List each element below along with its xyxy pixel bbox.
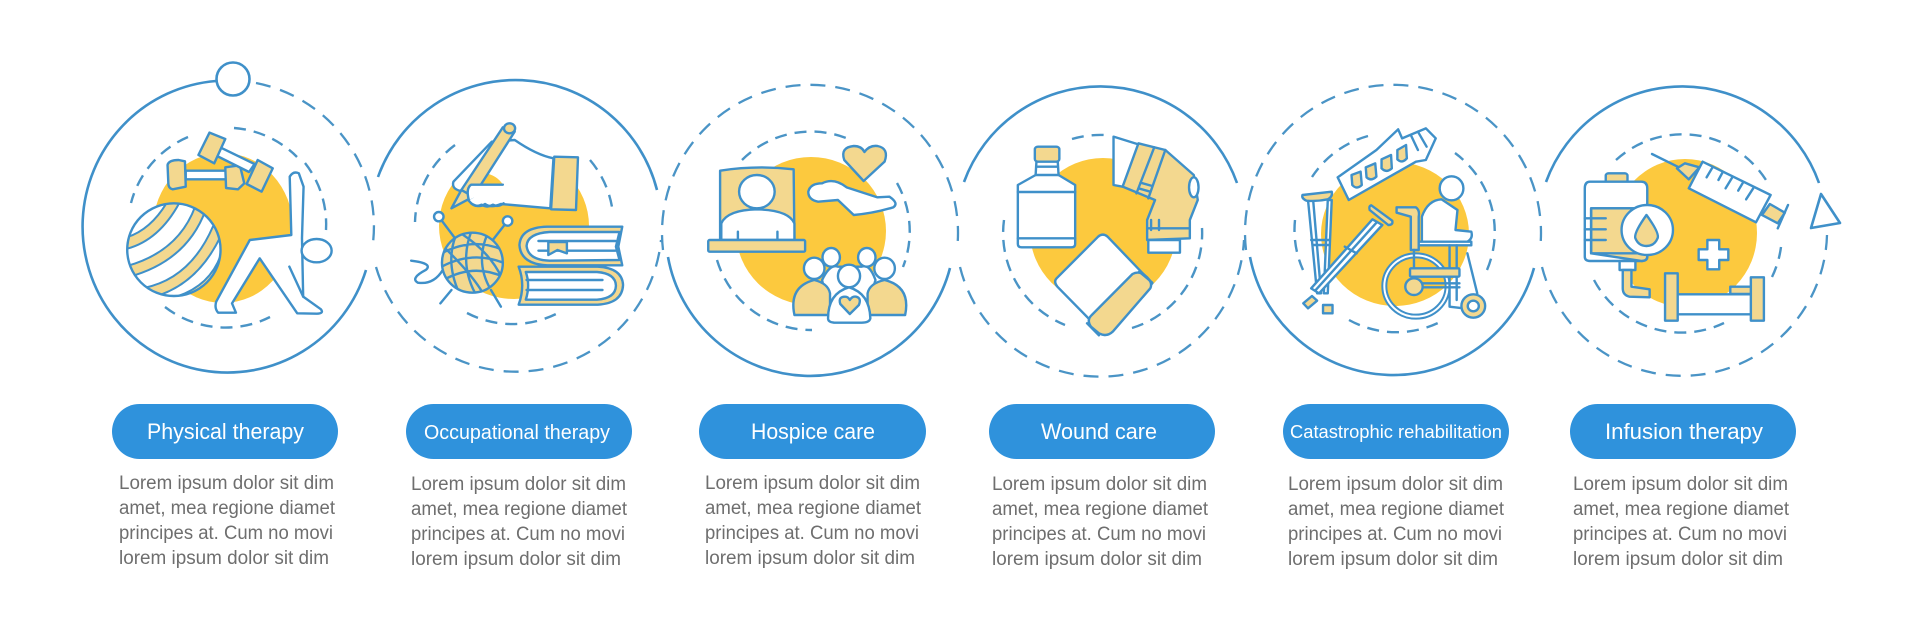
yellow blob <box>1321 162 1469 306</box>
inner dashed ring <box>1294 136 1495 332</box>
panel: hospice care <box>662 85 958 569</box>
body text <box>1288 474 1505 570</box>
pill: wound care <box>989 404 1215 459</box>
outer ring <box>376 80 661 372</box>
icon: heart <box>843 146 886 181</box>
pill: occupational therapy <box>406 404 632 459</box>
body text <box>1573 474 1790 570</box>
icon: hospice <box>708 146 906 323</box>
icon: bandage roll <box>1055 235 1152 335</box>
inner dashed ring <box>1003 135 1202 328</box>
icon: hospital bed <box>1665 273 1764 321</box>
body text <box>705 473 922 569</box>
body text <box>992 474 1209 570</box>
body text: principes at. Cum no movi <box>119 523 333 544</box>
panel: catastrophic rehabilitation <box>1245 85 1541 570</box>
icon: wound care <box>1018 137 1199 335</box>
icon: caring hand <box>808 181 896 215</box>
body text: amet, mea regione diamet <box>119 498 336 519</box>
icon: upright crutch <box>1302 192 1333 313</box>
outer ring <box>83 81 374 373</box>
inner dashed ring <box>415 145 612 324</box>
panel: wound care <box>960 86 1244 570</box>
body text: amet, mea regione diamet <box>705 498 922 519</box>
pill: infusion therapy: Infusion therapy <box>1605 419 1763 444</box>
body text: amet, mea regione diamet <box>992 499 1209 520</box>
body text <box>119 473 336 569</box>
inner dashed ring <box>717 132 910 330</box>
outer ring <box>1245 85 1541 375</box>
yellow blob <box>1613 159 1757 307</box>
icon: infusion <box>1585 154 1788 321</box>
inner dashed ring <box>1594 134 1781 333</box>
body text: amet, mea regione diamet <box>1573 499 1790 520</box>
icon: knee brace <box>1114 137 1199 253</box>
body text: lorem ipsum dolor sit dim <box>1288 549 1498 570</box>
pill: occupational therapy: Occupational therapy <box>424 422 610 444</box>
body text: amet, mea regione diamet <box>411 499 628 520</box>
outer ring <box>662 85 958 376</box>
body text: lorem ipsum dolor sit dim <box>705 548 915 569</box>
icon: IV bag <box>1585 173 1673 297</box>
icon: family <box>793 248 906 323</box>
icon: syringe <box>1652 154 1788 228</box>
pill: infusion therapy <box>1570 404 1796 459</box>
body text: principes at. Cum no movi <box>705 523 919 544</box>
icon: rehabilitation <box>1302 128 1485 318</box>
body text: lorem ipsum dolor sit dim <box>119 548 329 569</box>
body text: Lorem ipsum dolor sit dim <box>1573 474 1788 495</box>
icon: exercise ball <box>126 202 222 298</box>
icon: stack of books <box>519 227 623 305</box>
icon: yoga person <box>216 173 332 314</box>
icon: wheelchair <box>1384 176 1485 318</box>
body text: Lorem ipsum dolor sit dim <box>1288 474 1503 495</box>
icon: yarn and needles <box>411 212 512 307</box>
body text: principes at. Cum no movi <box>1288 524 1502 545</box>
inner dashed ring <box>131 128 326 328</box>
arrow head <box>1811 194 1840 228</box>
body text: Lorem ipsum dolor sit dim <box>119 473 334 494</box>
body text: lorem ipsum dolor sit dim <box>992 549 1202 570</box>
pill: physical therapy: Physical therapy <box>147 419 304 444</box>
body text: principes at. Cum no movi <box>992 524 1206 545</box>
body text: principes at. Cum no movi <box>411 524 625 545</box>
panel: physical therapy <box>83 62 374 569</box>
body text: Lorem ipsum dolor sit dim <box>705 473 920 494</box>
icon: leaning crutch <box>1303 205 1392 308</box>
yellow blob <box>736 157 886 305</box>
icon: writing, knitting, books <box>411 123 623 307</box>
body text: Lorem ipsum dolor sit dim <box>992 474 1207 495</box>
icon: patient in bed <box>708 167 805 252</box>
pill: physical therapy <box>112 404 338 459</box>
icon: exercise <box>123 133 332 314</box>
icon: horizontal dumbbell <box>168 160 244 189</box>
icon: diagonal dumbbell <box>198 133 273 192</box>
outer ring <box>1542 86 1827 376</box>
start marker circle <box>216 62 250 96</box>
pill: catastrophic rehabilitation <box>1283 404 1509 459</box>
outer ring <box>960 86 1244 377</box>
pill: hospice care <box>699 404 926 459</box>
panel: occupational therapy <box>376 80 661 570</box>
body text: amet, mea regione diamet <box>1288 499 1505 520</box>
body text: lorem ipsum dolor sit dim <box>1573 549 1783 570</box>
pill: hospice care: Hospice care <box>751 419 875 444</box>
body text: Lorem ipsum dolor sit dim <box>411 474 626 495</box>
body text: principes at. Cum no movi <box>1573 524 1787 545</box>
yellow blob <box>153 153 293 303</box>
pill: catastrophic rehabilitation: Catastrophic rehabilitation <box>1290 422 1502 442</box>
yellow blob <box>439 153 589 299</box>
panel: infusion therapy <box>1542 86 1840 570</box>
icon: writing hand <box>451 123 578 210</box>
icon: wrist splint <box>1338 128 1436 200</box>
icon: bottle <box>1018 147 1075 247</box>
body text: lorem ipsum dolor sit dim <box>411 549 621 570</box>
body text <box>411 474 628 570</box>
icon: medical cross <box>1699 240 1728 269</box>
yellow blob <box>1030 158 1176 304</box>
pill: wound care: Wound care <box>1041 419 1157 444</box>
